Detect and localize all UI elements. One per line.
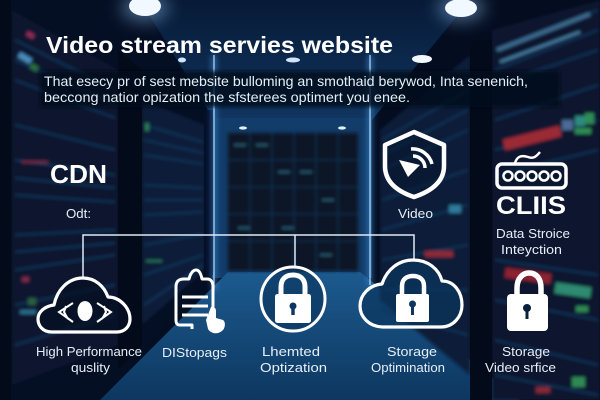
icon: shield with video and signal bbox=[385, 132, 444, 197]
icon: padlock bbox=[507, 273, 548, 331]
intro text block: beccong natior opization the sfsterees optimert you enee. bbox=[44, 89, 410, 105]
label: Lhemted Optization: Lhemted bbox=[262, 345, 320, 359]
label: Lhemted Optization bbox=[260, 345, 327, 375]
far wall server rack bbox=[228, 133, 358, 271]
label: Data Stroice Integration bbox=[496, 227, 570, 257]
icon: cloud with padlock bbox=[360, 260, 462, 327]
label: High Performance quality: quslity bbox=[71, 361, 111, 375]
heading: CDN bbox=[50, 159, 107, 221]
intro text block: That esecy pr of sest mebsite bulloming an smothaid berywod, Inta senenich, bbox=[44, 73, 528, 89]
label: DIStopags: DIStopags bbox=[162, 346, 227, 360]
label: Storage Optimination: Storage bbox=[387, 345, 437, 359]
intro text block bbox=[40, 71, 560, 107]
icon: document with hand pointer bbox=[176, 270, 225, 333]
label: Lhemted Optization: Optization bbox=[260, 361, 327, 375]
heading: CDN: CDN bbox=[50, 159, 107, 189]
ceiling lights bbox=[121, 0, 485, 130]
label: Data Stroice Integration: Inteyction bbox=[501, 243, 562, 257]
label: Video: Video bbox=[398, 207, 433, 221]
right server racks bbox=[380, 0, 600, 400]
icon: circle with padlock bbox=[261, 267, 325, 331]
icon: cloud with eye bbox=[38, 278, 130, 332]
title: Video stream servies website bbox=[46, 32, 393, 58]
label: High Performance quality bbox=[36, 345, 142, 375]
glowing light columns bbox=[214, 55, 370, 290]
icon: router / network device bbox=[497, 152, 566, 188]
label: High Performance quality: High Performance bbox=[36, 345, 142, 359]
label: Storage Optimination: Optimination bbox=[371, 361, 445, 375]
label: Storage Video srfice: Video srfice bbox=[485, 361, 556, 375]
label: Data Stroice Integration: Data Stroice bbox=[496, 227, 570, 241]
connector lines bbox=[83, 235, 414, 277]
heading: CLIIS: CLIIS bbox=[496, 192, 566, 220]
heading: CDN: Odt: bbox=[66, 207, 91, 221]
label: Storage Optimination bbox=[371, 345, 445, 375]
left server racks bbox=[12, 10, 205, 385]
label: Storage Video srfice bbox=[485, 345, 556, 375]
label: Storage Video srfice: Storage bbox=[502, 345, 550, 359]
